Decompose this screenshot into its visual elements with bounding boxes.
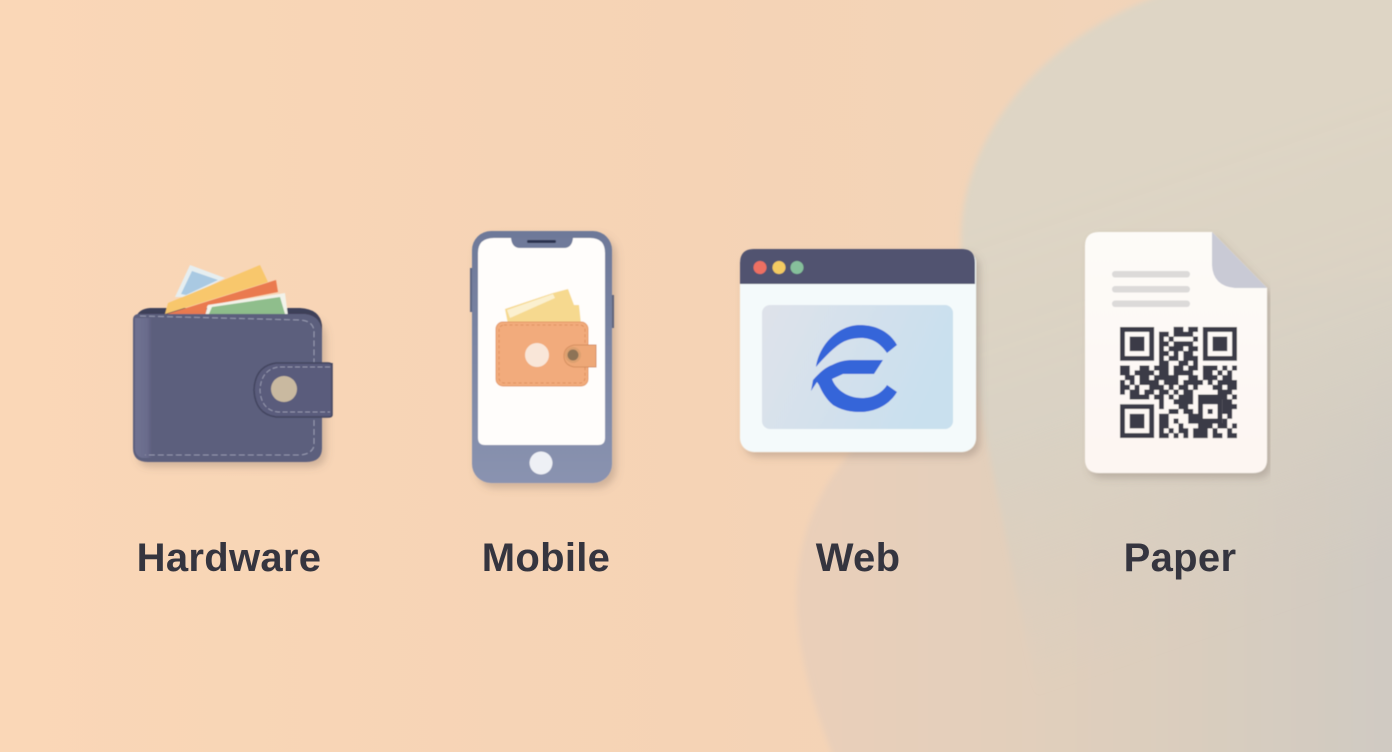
label: Paper: Paper xyxy=(1124,536,1236,580)
icon: browser window xyxy=(740,249,976,452)
icon: banknotes and cards xyxy=(165,265,288,316)
icon: phone with wallet xyxy=(470,231,614,483)
phone screen xyxy=(478,238,605,445)
panel: hardware xyxy=(133,265,332,580)
phone body xyxy=(472,231,612,483)
speaker xyxy=(527,240,556,243)
window dots xyxy=(754,261,804,274)
side buttons xyxy=(470,268,614,328)
window body xyxy=(740,249,976,452)
label: Mobile: Mobile xyxy=(482,536,610,580)
mini wallet cash xyxy=(505,289,581,324)
stitching xyxy=(140,316,314,455)
wallet clasp xyxy=(254,363,332,417)
title bar xyxy=(740,249,975,284)
panel: web xyxy=(740,249,976,580)
mini wallet body xyxy=(496,322,588,386)
wallet body xyxy=(133,314,322,462)
mini wallet coin xyxy=(525,343,549,367)
icon: hardware wallet xyxy=(133,265,332,462)
icon: paper wallet xyxy=(1085,232,1267,473)
label: Hardware: Hardware xyxy=(137,536,321,580)
panel: paper xyxy=(1085,232,1267,580)
panel: mobile xyxy=(470,231,614,580)
page fold xyxy=(1212,232,1267,288)
paper sheet xyxy=(1085,232,1267,473)
content panel xyxy=(762,305,953,429)
icon: blue e logo xyxy=(811,325,897,412)
wallet back edge xyxy=(136,308,322,340)
label: Web: Web xyxy=(816,536,900,580)
QR code xyxy=(1120,327,1237,438)
text lines xyxy=(1112,271,1190,307)
clasp snap xyxy=(271,376,297,402)
home button xyxy=(530,452,552,474)
mini wallet clasp xyxy=(564,345,596,367)
